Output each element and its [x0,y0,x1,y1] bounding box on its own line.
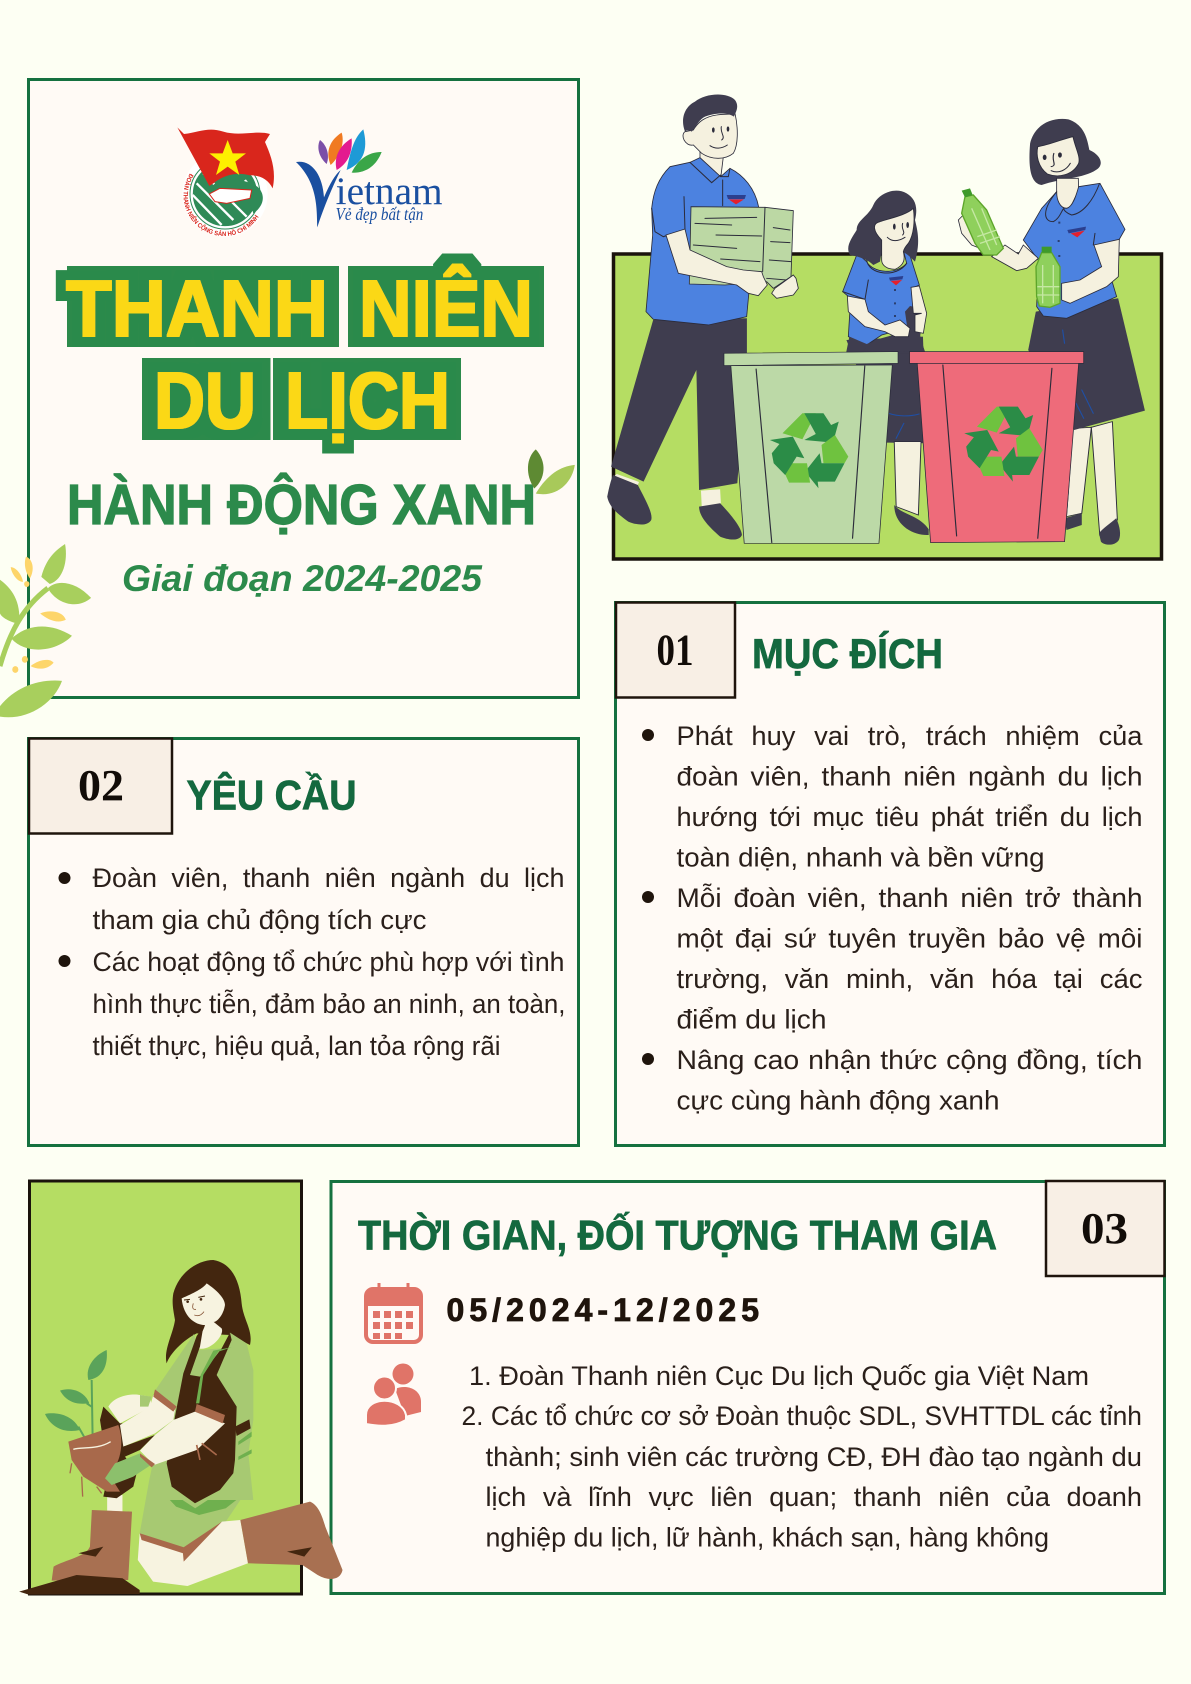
panel: 02 requirements [28,738,578,1146]
bullet list: requirements [58,863,566,1061]
figure: girl with bag [843,191,929,535]
number box 03 [1046,1181,1164,1276]
panel: 01 purpose [616,602,1164,1146]
icon: calendar [366,1283,421,1342]
bullet list: purpose: trường, văn minh, văn hóa tại các [676,964,1142,994]
root ball [68,1425,121,1492]
bullet list: requirements: tham gia chủ động tích cực [92,905,426,935]
arms [120,1395,175,1447]
panel: title [0,78,580,718]
apron [167,1327,237,1503]
glove [105,1453,153,1485]
heading: time and participants: THỜI GIAN, ĐỐI TƯỢNG THAM GIA [358,1210,997,1258]
back leg [138,1520,248,1586]
bullet list: purpose: toàn diện, nhanh và bền vững [676,842,1044,872]
icon: top right leaves [528,449,575,494]
bullet list: purpose: đoàn viên, thanh niên ngành du lịch [676,762,1142,792]
bullet list: purpose: Mỗi đoàn viên, thanh niên trở thành [676,882,1142,913]
bullet list: requirements: hình thực tiễn, đảm bảo an ninh, an toàn, [92,988,566,1019]
bullet list: purpose: điểm du lịch [676,1004,826,1034]
icon: red recycling bin [910,352,1084,543]
subtitle: period: Giai đoạn 2024-2025 [122,558,483,599]
numbered list: participants: 1. Đoàn Thanh niên Cục Du lịch Quốc gia Việt Nam [469,1361,1089,1391]
illustration: woman planting a seedling [19,1181,343,1595]
title: DU LỊCH: DU [154,356,256,445]
number box 03: 03 [1081,1204,1128,1253]
logo: Vietnam tourism [296,129,443,227]
logo: Đoàn Thanh niên emblem: ĐOÀN THANH NIÊN CỘNG SẢN HỒ CHÍ MINH [184,174,258,236]
bullet list: purpose: một đại sứ tuyên truyền bảo vệ môi [676,924,1142,954]
bullet list: purpose: Phát huy vai trò, trách nhiệm của [676,721,1143,751]
bullet list: purpose: hướng tới mục tiêu phát triển du lịch [676,802,1142,832]
number box 02: 02 [78,761,124,810]
title: DU LỊCH [142,356,461,445]
hair and face [166,1260,251,1363]
icon: left branch with leaves [0,544,91,717]
bullet list: requirements: Các hoạt động tổ chức phù hợp với tình [92,947,564,977]
heading: HÀNH ĐỘNG XANH: HÀNH ĐỘNG XANH [67,472,536,537]
bullet list: requirements: Đoàn viên, thanh niên ngành du lịch [92,863,564,893]
bullet list: purpose: Nâng cao nhận thức cộng đồng, tích [676,1045,1142,1075]
title: THANH NIÊN [66,264,544,353]
bullet list: requirements: thiết thực, hiệu quả, lan tỏa rộng rãi [92,1031,500,1061]
icon: people [366,1364,421,1426]
number box 01: 01 [656,626,694,674]
numbered list: participants: lịch và lĩnh vực liên quan; thanh niên của doanh [486,1482,1142,1512]
knee [108,1394,152,1423]
bullet list: purpose: cực cùng hành động xanh [676,1086,1000,1116]
heading: YÊU CẦU: YÊU CẦU [186,770,356,818]
illustration: youth sorting recycling [607,95,1162,559]
soil [19,1575,140,1595]
numbered list: participants: 2. Các tổ chức cơ sở Đoàn thuộc SDL, SVHTTDL các tỉnh [462,1401,1142,1431]
numbered list: participants [462,1361,1142,1552]
logo: Vietnam tourism: ietnam [336,169,443,213]
icon: green recycling bin [724,352,898,543]
number box 02 [29,738,172,834]
seedling [78,1380,93,1440]
lower dress [140,1427,251,1553]
number box 01 [616,602,735,698]
figure: young man with box [607,95,798,540]
logo: Đoàn Thanh niên emblem [178,128,274,236]
bullet list: purpose [642,721,1143,1116]
logo: Vietnam tourism: Vẻ đẹp bất tận [336,204,423,224]
numbered list: participants: nghiệp du lịch, lữ hành, khách sạn, hàng không [486,1522,1049,1552]
boots [52,1510,132,1581]
title: THANH NIÊN: THANH [66,264,328,353]
heading: MỤC ĐÍCH: MỤC ĐÍCH [752,630,943,677]
title: DU LỊCH: LỊCH [285,356,450,445]
date range: 05/2024-12/2025 [446,1292,759,1328]
shin [107,1495,122,1512]
figure: young woman with bottles [958,119,1145,545]
title: THANH NIÊN: NIÊN [359,264,533,353]
panel: 03 time and participants [331,1181,1164,1594]
numbered list: participants: thành; sinh viên các trường CĐ, ĐH đào tạo ngành du [486,1442,1142,1472]
